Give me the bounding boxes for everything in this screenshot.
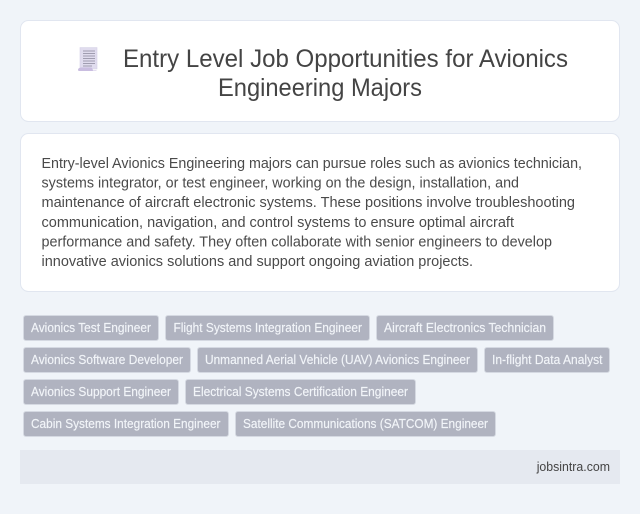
tag: Avionics Software Developer <box>24 348 190 372</box>
tag: Cabin Systems Integration Engineer <box>24 412 228 436</box>
tag: Avionics Test Engineer: Avionics Test Engineer <box>31 321 151 335</box>
text block: description: Entry-level Avionics Engineering majors can pursue roles such as avionics technician, <box>42 156 582 172</box>
text block: description: innovative avionics solutions and support ongoing aviation projects. <box>42 254 473 270</box>
tag: Satellite Communications (SATCOM) Engineer: Satellite Communications (SATCOM) Engineer <box>243 417 488 431</box>
tag: Aircraft Electronics Technician <box>376 316 554 340</box>
tag: Aircraft Electronics Technician: Aircraft Electronics Technician <box>384 321 546 335</box>
footer bar <box>20 450 620 484</box>
tag: Avionics Software Developer: Avionics Software Developer <box>31 353 183 367</box>
text block: description: communication, navigation, and control systems to ensure optimal aircraft <box>42 215 514 231</box>
title <box>123 45 568 102</box>
tag: Flight Systems Integration Engineer <box>166 316 370 340</box>
panel: description <box>20 134 620 292</box>
icon: document scroll <box>78 48 97 71</box>
tag: Flight Systems Integration Engineer: Flight Systems Integration Engineer <box>174 321 362 335</box>
tag: Satellite Communications (SATCOM) Engineer <box>236 412 496 436</box>
tag list <box>24 316 610 436</box>
tag: Electrical Systems Certification Engineer: Electrical Systems Certification Engineer <box>193 385 408 399</box>
tag: In-flight Data Analyst: In-flight Data Analyst <box>492 353 603 367</box>
tag: Unmanned Aerial Vehicle (UAV) Avionics Engineer: Unmanned Aerial Vehicle (UAV) Avionics Engineer <box>205 353 470 367</box>
text block: description <box>42 156 582 270</box>
title: Engineering Majors <box>218 74 422 102</box>
text block: description: systems integrator, or test engineer, working on the design, installation, and <box>42 176 519 192</box>
tag: Electrical Systems Certification Engineer <box>186 380 416 404</box>
tag: In-flight Data Analyst <box>484 348 610 372</box>
tag: Avionics Support Engineer <box>24 380 178 404</box>
title: Entry Level Job Opportunities for Avionics <box>123 45 568 73</box>
tag: Cabin Systems Integration Engineer: Cabin Systems Integration Engineer <box>31 417 220 431</box>
panel: header <box>20 20 620 122</box>
tag: Unmanned Aerial Vehicle (UAV) Avionics Engineer <box>198 348 478 372</box>
footer source text: jobsintra.com <box>536 460 610 474</box>
text block: description: maintenance of aircraft electronic systems. These positions involve troubleshooting <box>42 195 575 211</box>
tag: Avionics Support Engineer: Avionics Support Engineer <box>31 385 171 399</box>
tag: Avionics Test Engineer <box>24 316 158 340</box>
text block: description: performance and safety. They often collaborate with senior engineers to develop <box>42 234 552 250</box>
